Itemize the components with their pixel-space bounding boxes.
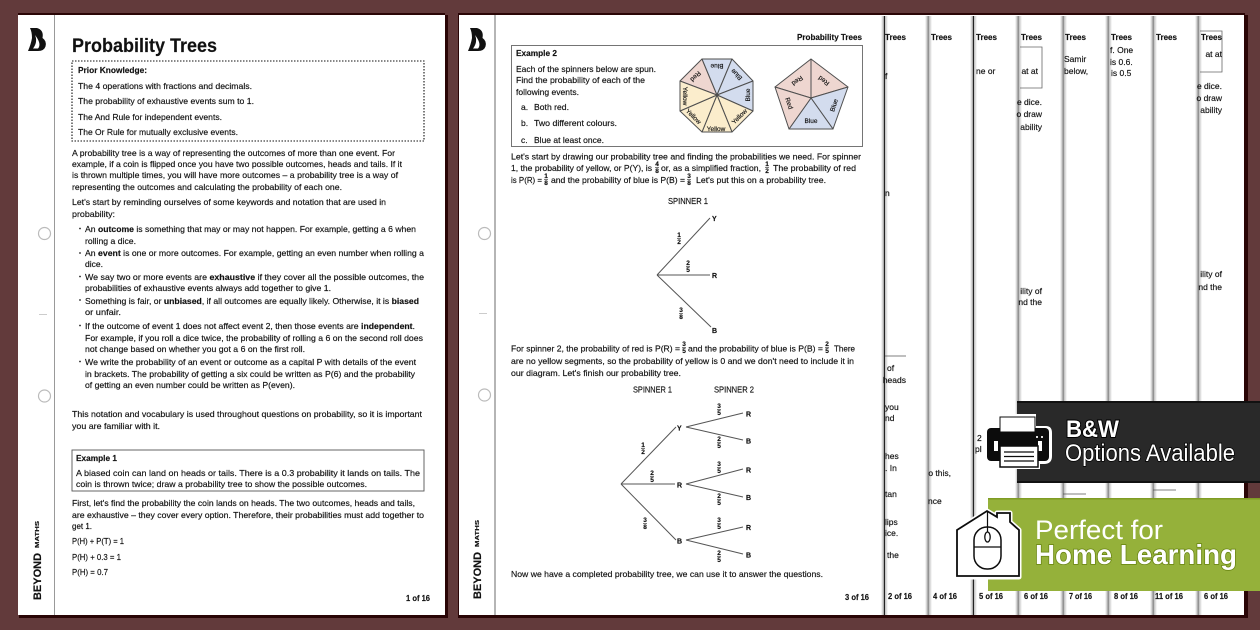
explanation paragraph 1: 8 [544,180,548,187]
strip text fragments: f [885,71,888,81]
spinner 1 labels: Red [688,69,702,83]
completed two-stage tree diagram: 3 [717,517,721,524]
closing sentence: Now we have a completed probability tree, we can use it to answer the questions. [511,569,823,579]
explanation paragraph 1: 1, the probability of yellow, or P(Y), is [511,163,652,173]
prior knowledge box [72,61,424,141]
spinner 1 octagon [680,59,753,132]
page edges [881,16,1202,615]
example 2 box: c. [521,135,528,145]
completed two-stage tree diagram: 5 [717,443,721,450]
spinner 1 tree diagram: 3 [679,307,683,314]
completed two-stage tree diagram: R [746,468,751,474]
strip headings: Trees [1156,32,1177,42]
explanation paragraph 1: Let's start by drawing our probability tree and finding the probabilities we need. For spinner [511,152,861,162]
strip page numbers: 8 of 16 [1114,591,1138,601]
explanation paragraph 2: and the probability of blue is P(B) = [688,344,823,354]
strip text fragments [883,45,1223,560]
brand text: Beyond Maths: MATHS [35,521,41,548]
keyword bullets: Something is fair, or unbiased, if all outcomes are equally likely. Otherwise, it is biased [85,296,419,306]
completed two-stage tree diagram: B [677,538,682,546]
intro text: Let's start by reminding ourselves of some keywords and notation that are used in [72,197,386,207]
explanation paragraph 1: is P(R) = [511,175,542,185]
intro text [72,148,403,219]
intro text: representing the outcomes and calculating the probability of each one. [72,182,342,192]
strip text fragments: at at [1021,66,1039,76]
keyword bullets: rolling a dice. [85,236,136,246]
strip text fragments: is 0.6. [1110,57,1133,67]
explanation paragraph 2: 5 [825,348,829,355]
banner: black and white options [984,401,1260,483]
banner heading: B&W [1066,416,1119,443]
strip text fragments: n [885,188,890,198]
strip text fragments: o draw [1016,109,1043,119]
banner: home learning [957,498,1260,591]
strip page numbers: 2 of 16 [888,591,912,601]
keyword bullets: An outcome is something that may or may not happen. For example, getting a 6 when [85,224,416,234]
strip text fragments: ility of [1020,286,1043,296]
strip text fragments: ability [1020,122,1043,132]
punch holes [38,228,50,402]
example 2 box: Example 2 [516,48,557,58]
strip text fragments: e dice. [1197,81,1222,91]
strip text fragments: the [887,550,899,560]
spinner 2 labels: Red [790,74,804,87]
strip text fragments: nd [885,413,895,423]
title: Probability Trees [72,36,217,57]
completed two-stage tree diagram [621,384,754,564]
strip headings: Trees [976,32,997,42]
strip headings [885,32,1222,42]
explanation paragraph 2: 5 [682,348,686,355]
running header: Probability Trees [797,32,862,42]
completed two-stage tree diagram: SPINNER 2 [714,384,754,394]
completed two-stage tree diagram: 5 [717,500,721,507]
keyword bullets: of getting an even number could be written as P(even). [85,380,295,390]
spinner 2 labels: Red [783,97,794,111]
spinner 2 pentagon [775,59,848,129]
strip headings: Trees [885,32,906,42]
spinner 1 tree diagram: 2 [677,239,681,246]
brand text: Beyond Maths [32,521,44,600]
strip page numbers: 7 of 16 [1069,591,1092,601]
spinner 1 tree diagram: 2 [686,260,690,267]
keyword bullets: For example, if you roll a dice twice, the probability of rolling a 6 on the second roll does [85,333,423,343]
example 1 working [72,498,424,577]
explanation paragraph 2 [511,341,855,378]
example 1 working: get 1. [72,521,92,531]
spinner 1 tree diagram: 8 [679,314,683,321]
completed two-stage tree diagram: 5 [717,468,721,475]
explanation paragraph 1: or, as a simplified fraction, [661,163,761,173]
strip page numbers [888,591,1228,601]
prior knowledge box: Prior Knowledge: [78,65,147,75]
completed two-stage tree diagram: 8 [643,524,647,531]
completed two-stage tree diagram: SPINNER 1 [633,384,672,394]
example 1 working: P(H) = 0.7 [72,567,108,577]
completed two-stage tree diagram: 5 [717,557,721,564]
explanation paragraph 2: There [834,344,855,354]
completed two-stage tree diagram: 5 [717,410,721,417]
example 2 box: Each of the spinners below are spun. [516,64,656,74]
spinner 1 labels: Blue [710,62,724,69]
strip text fragments: hes [885,451,899,461]
strip text fragments: nce [928,496,942,506]
banner subheading: Options Available [1065,440,1235,467]
prior knowledge box: The probability of exhaustive events sum to 1. [78,96,254,106]
strip boxes [885,31,1222,494]
brand text: Beyond Maths: MATHS [475,520,481,547]
example 1 working: First, let's find the probability the coin lands on heads. The two outcomes, heads and tails, [72,498,415,508]
example 2 box: a. [521,102,528,112]
keyword bullets: An event is one or more outcomes. For example, getting an even number when rolling a [85,248,424,258]
spinner 1 tree diagram: Y [712,216,717,223]
spinner 1 tree diagram: B [712,328,717,335]
notation note: you are familiar with it. [72,421,160,431]
example 2 box: following events. [516,87,579,97]
spinner 2 labels: Red [817,74,831,87]
strip text fragments: ne or [976,66,996,76]
intro text: example, if a coin is flipped once you have two possible outcomes, heads and tails. If it [72,159,403,169]
completed two-stage tree diagram: 5 [717,524,721,531]
strip text fragments: nd the [1018,297,1042,307]
strip text fragments: below, [1064,66,1088,76]
completed two-stage tree diagram: 1 [641,442,645,449]
example 1 working: P(H) + P(T) = 1 [72,536,124,546]
notation note: This notation and vocabulary is used throughout questions on probability, so it is important [72,409,423,419]
strip page numbers: 6 of 16 [1204,591,1228,601]
keyword bullets [79,224,424,390]
strip text fragments: you [885,402,899,412]
strip page numbers: 4 of 16 [933,591,957,601]
example 1 working: P(H) + 0.3 = 1 [72,552,121,562]
completed two-stage tree diagram: 2 [650,470,654,477]
explanation paragraph 1: and the probability of blue is P(B) = [551,175,685,185]
keyword bullets: not change based on whether you got a 6 on the first roll. [85,344,305,354]
spinner 1 labels: Yellow [681,87,688,106]
icon: house with mouse [957,511,1019,577]
explanation paragraph 2: 2 [825,341,829,348]
strip text fragments: heads [883,375,906,385]
example 2 box: Blue at least once. [534,135,604,145]
panel: stacked worksheet pages [458,13,1248,618]
keyword bullets: or unfair. [85,307,121,317]
strip page numbers: 11 of 16 [1155,591,1183,601]
completed two-stage tree diagram: 3 [643,517,647,524]
spinner 1 tree diagram: R [712,273,717,280]
completed two-stage tree diagram: R [746,525,751,532]
strip text fragments: ility of [1200,269,1223,279]
strip text fragments: of [887,363,895,373]
completed two-stage tree diagram: B [746,495,751,502]
spinner 1 tree diagram: 5 [686,267,690,274]
completed two-stage tree diagram: Y [677,426,682,432]
strip text fragments: e dice. [1017,97,1042,107]
strip text fragments: o this, [928,468,951,478]
explanation paragraph 1: 8 [687,180,691,187]
completed two-stage tree diagram: R [677,482,682,490]
panel: page 1 worksheet [18,13,448,618]
strip text fragments: at at [1205,49,1223,59]
strip text fragments: pl [975,444,982,454]
explanation paragraph 2: 3 [682,341,686,348]
strip headings: Trees [1111,32,1132,42]
explanation paragraph 1: 4 [655,161,659,168]
strip text fragments: ice. [885,528,898,538]
example 2 box: Two different colours. [534,118,617,128]
punch holes [478,228,490,401]
example 2 box: Both red. [534,102,569,112]
spinner 2 labels [783,74,840,125]
brand text: Beyond Maths [472,520,484,599]
example 2 box [512,46,862,146]
completed two-stage tree diagram: 3 [717,461,721,468]
strip text fragments: f. One [1110,45,1133,55]
icon: Beyond logo [468,28,486,51]
completed two-stage tree diagram: 5 [650,477,654,484]
explanation paragraph 2: For spinner 2, the probability of red is P(R) = [511,344,680,354]
explanation paragraph 1: 8 [655,168,659,175]
explanation paragraph 2: are no yellow segments, so the probability of yellow is 0 and we don't need to include it in [511,356,854,366]
keyword bullets: If the outcome of event 1 does not affect event 2, then those events are independent. [85,321,415,331]
notation note [72,409,423,431]
completed two-stage tree diagram: 2 [717,493,721,500]
strip text fragments: nd the [1198,282,1222,292]
explanation paragraph 1: 2 [765,168,769,175]
spinner 1 labels: Yellow [731,108,749,126]
example 2 box: b. [521,118,528,128]
strip text fragments: tan [885,489,897,499]
strip page numbers: 6 of 16 [1024,591,1048,601]
spinner 2 labels: Blue [804,118,818,125]
intro text: is thrown multiple times, you will have more outcomes – a probability tree is a way of [72,170,399,180]
example 2 box: Find the probability of each of the [516,75,645,85]
strip text fragments: Samir [1064,54,1086,64]
example 1 box: coin is thrown twice; draw a probability tree to show the possible outcomes. [76,479,367,489]
explanation paragraph 1: The probability of red [773,163,856,173]
page number: 1 of 16 [406,593,430,603]
strip text fragments: lips [885,517,898,527]
explanation paragraph 1: 1 [765,161,769,168]
example 1 box: Example 1 [76,453,117,463]
strip text fragments: is 0.5 [1111,68,1132,78]
spinner 1 tree diagram: 1 [677,232,681,239]
brand text: Beyond Maths: BEYOND [32,553,44,600]
strip headings: Trees [1065,32,1086,42]
explanation paragraph 1: 3 [687,173,691,180]
panel: page 3 worksheet [468,15,869,615]
spinner 1 labels [681,62,752,133]
spinner 2 labels: Blue [829,98,840,113]
prior knowledge box: The 4 operations with fractions and decimals. [78,81,252,91]
explanation paragraph 2: our diagram. Let's finish our probability tree. [511,368,681,378]
explanation paragraph 1: Let's put this on a probability tree. [696,175,826,185]
spinner 1 labels: Blue [745,88,752,102]
intro text: probability: [72,209,115,219]
keyword bullets: We say two or more events are exhaustive if they cover all the possible outcomes, the [85,272,424,282]
keyword bullets: dice. [85,259,103,269]
explanation paragraph 1: 1 [544,173,548,180]
strip headings: Trees [931,32,952,42]
strip headings: Trees [1021,32,1042,42]
spinner 1 tree diagram: SPINNER 1 [668,196,708,206]
brand text: Beyond Maths: BEYOND [472,552,484,599]
strip text fragments: o draw [1196,93,1223,103]
completed two-stage tree diagram: 2 [717,436,721,443]
completed two-stage tree diagram: R [746,412,751,418]
explanation paragraph 1 [511,152,861,187]
spinner 1 labels: Yellow [707,126,726,133]
strip page numbers: 5 of 16 [979,591,1003,601]
strip text fragments: 2 [977,433,982,443]
prior knowledge box: The And Rule for independent events. [78,112,222,122]
keyword bullets: We write the probability of an event or outcome as a capital P with details of the event [85,357,417,367]
strip text fragments: ability [1200,105,1223,115]
page number: 3 of 16 [845,592,869,602]
example 1 box: A biased coin can land on heads or tails. There is a 0.3 probability it lands on tails. The [76,468,420,478]
strip headings: Trees [1201,32,1222,42]
icon: printer [984,414,1052,469]
intro text: A probability tree is a way of representing the outcomes of more than one event. For [72,148,395,158]
completed two-stage tree diagram: 3 [717,403,721,410]
banner subheading: Home Learning [1035,539,1237,570]
completed two-stage tree diagram: 2 [717,550,721,557]
spinner 1 labels: Yellow [684,108,702,126]
prior knowledge box: The Or Rule for mutually exclusive events. [78,127,238,137]
icon: Beyond logo [28,28,46,51]
spinner 1 tree diagram [657,196,717,335]
keyword bullets: probabilities of exhaustive events always add together to give 1. [85,283,331,293]
completed two-stage tree diagram: B [746,552,751,560]
keyword bullets: in brackets. The probability of getting a six could be written as P(6) and the probability [85,369,416,379]
strip text fragments: . In [885,463,897,473]
example 1 box [72,450,424,491]
spinner 1 labels: Blue [730,67,744,81]
example 1 working: are exhaustive – they cover every option. Therefore, their probabilities must add together to [72,510,424,520]
completed two-stage tree diagram: B [746,438,751,446]
completed two-stage tree diagram: 2 [641,449,645,456]
banner heading: Perfect for [1035,515,1163,545]
